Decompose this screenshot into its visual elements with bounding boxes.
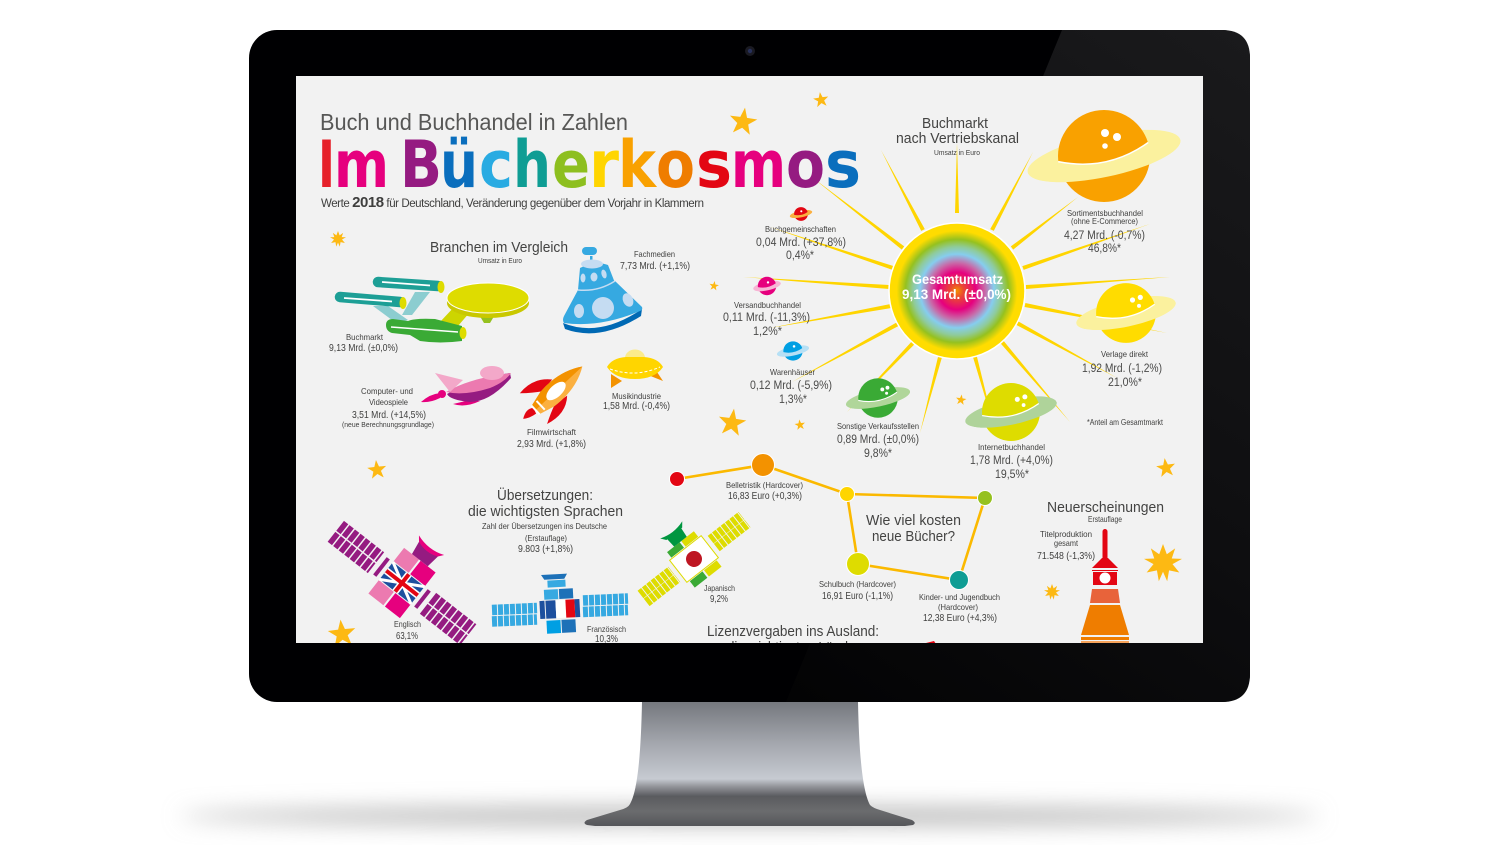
main title: s	[825, 128, 861, 203]
label: Titelproduktion	[1037, 529, 1095, 562]
label: Verlage direkt	[1082, 351, 1162, 388]
label: Sonstige Verkaufsstellen: Sonstige Verkaufsstellen	[837, 421, 919, 431]
label: Buchgemeinschaften	[756, 224, 846, 262]
label: Computer- und Videospiele: Computer- und	[361, 386, 413, 396]
section: Branchen im Vergleich heading	[431, 241, 568, 263]
label: Musikindustrie	[604, 393, 670, 411]
heading: Neuerscheinungen: Erstauflage	[1088, 514, 1122, 524]
label: Computer- und Videospiele	[342, 386, 434, 429]
label: Sortimentsbuchhandel	[1064, 208, 1145, 255]
label: Titelproduktion: 71.548 (-1,3%)	[1037, 551, 1095, 562]
label: Musikindustrie: 1,58 Mrd. (-0,4%)	[603, 401, 670, 412]
label: Internetbuchhandel: 19,5%*	[995, 469, 1029, 481]
icon: starship Buchmarkt	[340, 281, 529, 342]
main title: s	[696, 128, 732, 203]
planet: Verlage direkt	[1074, 283, 1178, 343]
label: Belletristik: Belletristik (Hardcover)	[726, 480, 803, 490]
label: Französisch: Französisch	[587, 624, 626, 634]
icon: satellite Japan	[621, 490, 759, 617]
main title: m	[334, 128, 389, 203]
label: Versandbuchhandel: 0,11 Mrd. (-11,3%)	[723, 312, 810, 324]
label: Belletristik	[726, 482, 803, 501]
icon: UFO Musikindustrie	[607, 350, 663, 388]
planet: Warenhäuser	[776, 341, 810, 361]
heading: Buchmarkt nach Vertriebskanal	[896, 117, 1018, 155]
label: Belletristik: 16,83 Euro (+0,3%)	[728, 491, 802, 502]
label: Computer- und Videospiele: 3,51 Mrd. (+14,5%)	[352, 410, 426, 421]
heading: Wie viel kosten neue Bücher	[866, 514, 960, 541]
heading: Buchmarkt nach Vertriebskanal: Umsatz in Euro	[934, 150, 980, 157]
label: Englisch: 63,1%	[396, 631, 418, 642]
label: Versandbuchhandel	[723, 300, 810, 338]
label: Versandbuchhandel: Versandbuchhandel	[734, 300, 801, 310]
stand shadow	[180, 806, 1320, 826]
label: Warenhäuser	[750, 367, 832, 406]
label: Schulbuch	[819, 581, 896, 601]
monitor bezel	[249, 30, 1250, 702]
label: Fachmedien	[620, 251, 690, 271]
heading: Wie viel kosten neue Bücher: Wie viel kosten	[866, 512, 961, 529]
heading: Übersetzungen: Zahl der Übersetzungen ins Deutsche	[482, 521, 607, 531]
icon: capsule Fachmedien	[563, 247, 642, 333]
label: Kinder- und Jugendbuch	[920, 594, 1000, 623]
label: Verlage direkt: 1,92 Mrd. (-1,2%)	[1082, 363, 1162, 375]
main title: k	[618, 128, 658, 203]
label: Buchmarkt	[329, 334, 398, 353]
label: Buchgemeinschaften: 0,04 Mrd. (+37,8%)	[756, 237, 846, 249]
title block	[318, 109, 861, 211]
heading: Lizenzvergaben ins Ausland: die wichtigsten Länder	[727, 639, 860, 656]
main title: B	[400, 128, 442, 203]
label: Computer- und Videospiele: Videospiele	[369, 397, 408, 407]
main title: m	[731, 128, 786, 203]
sun rays	[743, 143, 1170, 433]
sun: Gesamtumsatz: 9,13 Mrd. (±0,0%)	[902, 287, 1011, 302]
label: Computer- und Videospiele: (neue Berechnungsgrundlage)	[342, 422, 434, 429]
heading: Übersetzungen: Übersetzungen:	[497, 486, 593, 504]
label: Verlage direkt: Verlage direkt	[1101, 349, 1149, 359]
icon: satellite France	[492, 573, 628, 634]
label: Kinder- und Jugendbuch: 12,38 Euro (+4,3%)	[923, 613, 997, 624]
icon: jet Computer- und Videospiele	[421, 366, 511, 405]
main title: o	[656, 128, 695, 203]
screen background	[296, 76, 1203, 643]
label: Warenhäuser: 1,3%*	[779, 394, 807, 406]
icon: clipped red tip	[922, 641, 936, 644]
label: Filmwirtschaft: 2,93 Mrd. (+1,8%)	[517, 439, 586, 450]
label: Französisch: 10,3%	[595, 634, 618, 645]
kicker heading: Buch und Buchhandel in Zahlen	[320, 109, 628, 135]
label: Schulbuch: Schulbuch (Hardcover)	[819, 579, 896, 589]
section: Branchen im Vergleich heading: Umsatz in Euro	[478, 258, 522, 265]
heading: Wie viel kosten neue Bücher: neue Bücher?	[872, 528, 955, 545]
bezel gloss	[786, 30, 1250, 702]
main title: e	[552, 128, 590, 203]
heading: Übersetzungen: (Erstauflage)	[525, 533, 567, 543]
planet: Sonstige Verkaufsstellen	[844, 378, 912, 418]
icon: rocket Filmwirtschaft	[520, 366, 582, 424]
heading: Neuerscheinungen	[1047, 499, 1164, 524]
planet: Buchgemeinschaften	[789, 207, 813, 221]
label: Fachmedien: 7,73 Mrd. (+1,1%)	[620, 261, 690, 272]
planet: Versandbuchhandel	[752, 277, 782, 295]
label: Warenhäuser: 0,12 Mrd. (-5,9%)	[750, 380, 832, 392]
planet: Internetbuchhandel	[963, 383, 1059, 441]
label: Schulbuch: 16,91 Euro (-1,1%)	[822, 591, 893, 602]
label: Japanisch: Japanisch	[704, 583, 735, 593]
label: Sortimentsbuchhandel: 4,27 Mrd. (-0,7%)	[1064, 230, 1145, 242]
label: Buchgemeinschaften: Buchgemeinschaften	[765, 224, 836, 234]
sun: Gesamtumsatz: Gesamtumsatz	[912, 272, 1003, 287]
heading: Übersetzungen	[468, 486, 623, 555]
main title: I	[318, 128, 335, 203]
label: Sortimentsbuchhandel: 46,8%*	[1088, 243, 1121, 255]
main title: ü	[440, 128, 478, 203]
label: Buchmarkt: Buchmarkt	[346, 332, 384, 342]
heading: Buchmarkt nach Vertriebskanal: nach Vertriebskanal	[896, 130, 1019, 147]
label: Internetbuchhandel: 1,78 Mrd. (+4,0%)	[970, 455, 1053, 467]
subtitle: Werte 2018 für Deutschland, Veränderung gegenüber dem Vorjahr in Klammern	[321, 194, 704, 211]
label: Warenhäuser: Warenhäuser	[770, 367, 815, 377]
label: Fachmedien: Fachmedien	[634, 249, 675, 259]
label: Sonstige Verkaufsstellen	[837, 421, 919, 460]
label: Titelproduktion: Titelproduktion	[1040, 529, 1092, 539]
main title	[322, 136, 858, 188]
webcam	[745, 46, 755, 56]
label: Kinder- und Jugendbuch: (Hardcover)	[938, 602, 978, 612]
heading: Lizenzvergaben ins Ausland: Lizenzvergaben ins Ausland:	[707, 623, 879, 640]
heading: Übersetzungen: 9.803 (+1,8%)	[518, 544, 573, 555]
label: Japanisch	[704, 583, 735, 605]
main title: o	[786, 128, 825, 203]
sun: Gesamtumsatz	[889, 223, 1025, 359]
heading: Übersetzungen: die wichtigsten Sprachen	[468, 503, 623, 520]
stars	[327, 91, 1182, 647]
label: Filmwirtschaft: Filmwirtschaft	[527, 427, 577, 437]
label: Buchmarkt: 9,13 Mrd. (±0,0%)	[329, 343, 398, 354]
planet: Sortimentsbuchhandel	[1023, 110, 1185, 202]
heading: Buchmarkt nach Vertriebskanal: Buchmarkt	[922, 115, 989, 132]
label: Englisch: Englisch	[394, 619, 421, 629]
label: Musikindustrie: Musikindustrie	[612, 391, 661, 401]
heading: Neuerscheinungen: Neuerscheinungen	[1047, 499, 1164, 516]
icon: lighthouse rocket	[1081, 529, 1129, 643]
monitor stand	[584, 702, 915, 826]
footnote: *Anteil am Gesamtmarkt	[1087, 417, 1164, 427]
infographic screen content	[318, 91, 1185, 658]
label: Filmwirtschaft	[517, 429, 586, 449]
label: Internetbuchhandel: Internetbuchhandel	[978, 442, 1045, 452]
label: Sonstige Verkaufsstellen: 9,8%*	[864, 448, 892, 460]
label: Verlage direkt: 21,0%*	[1108, 377, 1142, 389]
label: Sortimentsbuchhandel: Sortimentsbuchhandel	[1067, 208, 1143, 218]
label: Kinder- und Jugendbuch: Kinder- und Jugendbuch	[919, 592, 1000, 602]
label: Versandbuchhandel: 1,2%*	[753, 326, 782, 338]
section: Branchen im Vergleich heading: Branchen im Vergleich	[430, 239, 568, 256]
main title: c	[479, 128, 513, 203]
heading: Lizenzvergaben ins Ausland	[707, 623, 879, 656]
main title: h	[513, 128, 551, 203]
main title: r	[589, 128, 619, 203]
constellation: book prices	[670, 454, 992, 590]
label: Internetbuchhandel	[970, 444, 1052, 480]
label: Buchgemeinschaften: 0,4%*	[786, 250, 814, 262]
label: Französisch	[587, 624, 626, 645]
label: Sortimentsbuchhandel: (ohne E-Commerce)	[1071, 216, 1138, 226]
label: Englisch	[394, 619, 421, 642]
icon: satellite UK	[318, 493, 498, 658]
label: Titelproduktion: gesamt	[1054, 538, 1079, 548]
label: Sonstige Verkaufsstellen: 0,89 Mrd. (±0,0%)	[837, 434, 919, 446]
label: Japanisch: 9,2%	[710, 594, 728, 605]
